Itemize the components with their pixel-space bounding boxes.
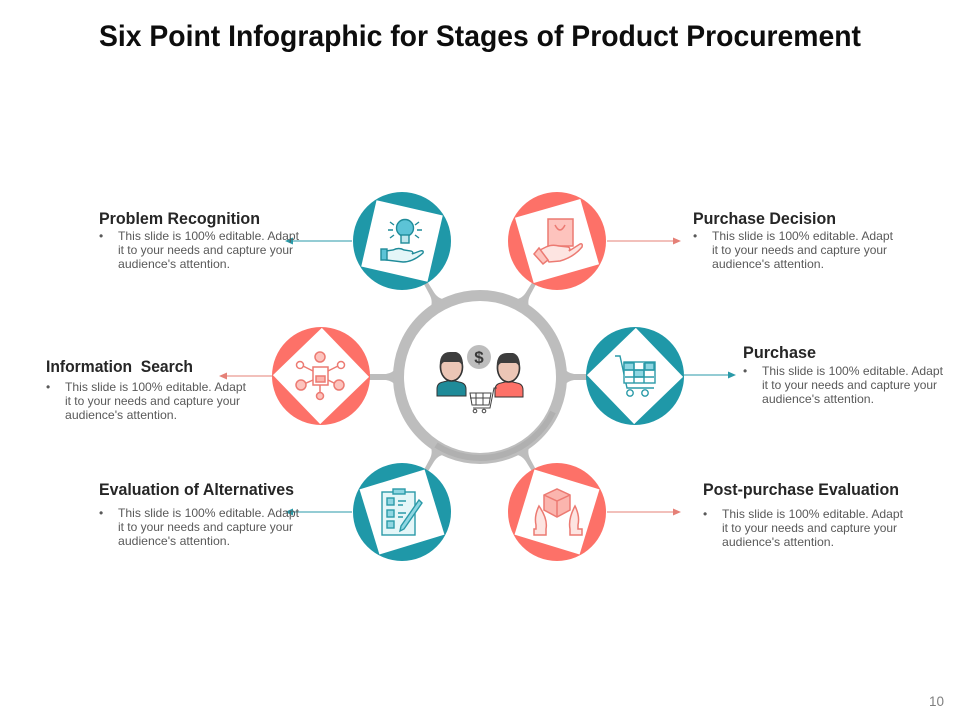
panel: post-purchase evaluation icon xyxy=(508,463,606,561)
text block: post-purchase evaluation xyxy=(703,481,904,549)
text block: purchase decision: audience's attention. xyxy=(712,257,824,271)
text block: problem recognition: audience's attention. xyxy=(118,257,230,271)
icon: checklist clipboard xyxy=(382,489,422,535)
text block: evaluation of alternatives: audience's attention. xyxy=(118,534,230,548)
text block: problem recognition: This slide is 100% editable. Adapt xyxy=(118,229,300,243)
text block: purchase: This slide is 100% editable. Adapt xyxy=(762,364,944,378)
text block: post-purchase evaluation: • xyxy=(703,507,707,521)
panel: purchase decision icon xyxy=(508,192,606,290)
text block: problem recognition: it to your needs and capture your xyxy=(118,243,293,257)
icon: network of nodes xyxy=(296,352,344,400)
text block: purchase decision xyxy=(693,210,894,271)
text block: evaluation of alternatives: • xyxy=(99,506,103,520)
text block: purchase: Purchase xyxy=(743,344,816,362)
icon: shopping cart xyxy=(615,356,655,396)
text block: evaluation of alternatives: Evaluation of Alternatives xyxy=(99,481,294,499)
text block: purchase xyxy=(743,344,944,406)
text block: purchase decision: This slide is 100% editable. Adapt xyxy=(712,229,894,243)
text block: post-purchase evaluation: it to your needs and capture your xyxy=(722,521,897,535)
text block: post-purchase evaluation: This slide is 100% editable. Adapt xyxy=(722,507,904,521)
text block: purchase decision: • xyxy=(693,229,697,243)
arrow: purchase decision xyxy=(607,238,681,244)
icon: two buyers with dollar and cart: $ xyxy=(474,348,484,367)
panel: evaluation of alternatives icon xyxy=(353,463,451,561)
text block: purchase: audience's attention. xyxy=(762,392,874,406)
icon: light bulb in hand xyxy=(381,220,423,262)
text block: post-purchase evaluation: Post-purchase Evaluation xyxy=(703,481,899,499)
text block: information search: Information Search xyxy=(46,358,193,376)
text block: information search: • xyxy=(46,380,50,394)
icon: shopping bag in hand xyxy=(534,219,582,264)
arrow: purchase xyxy=(684,372,736,378)
text block: problem recognition: • xyxy=(99,229,103,243)
page number: 10 xyxy=(929,694,944,709)
text block: purchase decision: it to your needs and capture your xyxy=(712,243,887,257)
text block: information search: it to your needs and capture your xyxy=(65,394,240,408)
panel: purchase icon xyxy=(586,327,684,425)
text block: evaluation of alternatives: This slide is 100% editable. Adapt xyxy=(118,506,300,520)
title: Six Point Infographic for Stages of Product Procurement xyxy=(99,20,861,53)
text block: information search: audience's attention. xyxy=(65,408,177,422)
text block: purchase: • xyxy=(743,364,747,378)
text block: problem recognition: Problem Recognition xyxy=(99,210,260,228)
arrow: post-purchase evaluation xyxy=(607,508,681,516)
text block: evaluation of alternatives: it to your needs and capture your xyxy=(118,520,293,534)
panel: information search icon xyxy=(272,327,370,425)
text block: problem recognition xyxy=(99,210,300,271)
text block: purchase decision: Purchase Decision xyxy=(693,210,836,228)
arrow: problem recognition xyxy=(285,238,352,244)
arrow: evaluation of alternatives xyxy=(285,508,352,516)
central ring with connectors xyxy=(368,275,592,479)
text block: information search: This slide is 100% editable. Adapt xyxy=(65,380,247,394)
text block: purchase: it to your needs and capture your xyxy=(762,378,937,392)
icon: box between hands xyxy=(534,489,582,535)
arrow: information search xyxy=(219,372,272,380)
text block: information search xyxy=(46,358,247,422)
text block: evaluation of alternatives xyxy=(99,481,300,548)
text block: post-purchase evaluation: audience's attention. xyxy=(722,535,834,549)
panel: problem recognition icon xyxy=(353,192,451,290)
icon: two buyers with dollar and cart xyxy=(437,345,523,413)
